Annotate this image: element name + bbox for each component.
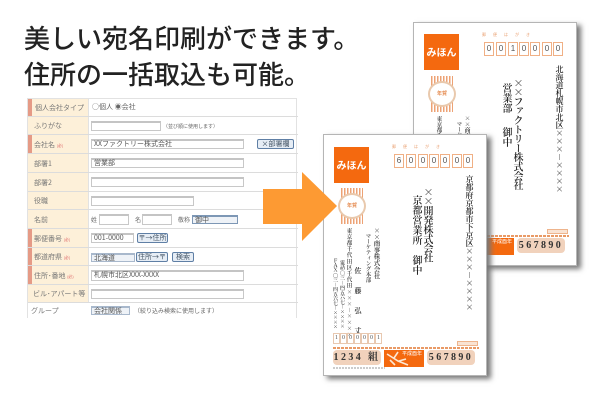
postcard: front (323, 134, 487, 376)
title line 2: 住所の一括取込も可能。 (24, 55, 310, 92)
panel: address entry form (27, 98, 297, 318)
postal code boxes: 1 (511, 44, 515, 53)
row: group: （絞り込み検索に使用します） (134, 306, 218, 315)
unstamped label (424, 34, 459, 70)
fine print (423, 235, 569, 237)
new year seal (341, 188, 363, 224)
row: prefecture: 北海道 (94, 253, 115, 263)
row: postal code: 〒→住所 (138, 233, 166, 243)
postal code boxes: 0 (421, 156, 425, 165)
new year seal: 年賀 (347, 202, 357, 209)
lottery number: 567890 (519, 240, 563, 251)
row: furigana: （並び順に使用します） (163, 123, 218, 130)
row: name: 御中 (195, 215, 209, 225)
postal code boxes (394, 154, 473, 168)
row: name (28, 210, 298, 229)
row: furigana: ふりがな (34, 121, 62, 131)
postcard: back (413, 22, 577, 266)
row: job title (28, 192, 298, 210)
row: department 2: 部署2 (34, 178, 52, 188)
row: company type: ○個人 ◉会社 (92, 102, 136, 112)
postal code boxes: 0 (556, 44, 560, 53)
row: name: 敬称 (178, 215, 190, 224)
row: department 1 (28, 154, 298, 173)
unstamped label (334, 147, 369, 183)
row: company type: 個人会社タイプ (35, 103, 84, 113)
unstamped label: みほん (336, 157, 366, 172)
sender postal boxes: 0 (370, 335, 373, 341)
row: postal code: 001-0000 (94, 233, 124, 243)
row: company name: XXファクトリー株式会社 (94, 139, 172, 149)
row: company name (28, 135, 298, 154)
sender phone: 電話 〇三－四五六七－×××× (339, 260, 346, 328)
postal code boxes: 6 (397, 156, 401, 165)
sender postal boxes: 0 (342, 335, 345, 341)
row: address: 札幌市北区XXX-XXXX (94, 270, 159, 280)
row: prefecture: 検索 (176, 252, 190, 262)
recipient address: 京都府京都市下京区×××－×××× (464, 175, 475, 311)
new year banner: 平成酉年 (492, 238, 512, 245)
honorific: 御中 (410, 255, 425, 275)
sender address: 東京都千代田区千代田×××－×××× (346, 228, 354, 338)
row: prefecture (28, 248, 298, 266)
row: company name: 会社名 (必) (34, 140, 63, 150)
lottery number (427, 350, 475, 365)
sender division: マーケ (456, 121, 464, 138)
sender postal boxes: 1 (377, 335, 380, 341)
postal code boxes: 0 (522, 44, 526, 53)
row: postal code (28, 229, 298, 248)
lottery mark (547, 229, 568, 234)
grey fine print (333, 367, 385, 369)
recipient department: 営業部 (500, 83, 515, 113)
new year seal (431, 76, 453, 112)
postcard heading: 郵便はがき (392, 144, 447, 150)
recipient company: ××ファクトリー株式会社 (511, 78, 526, 190)
row: building: ビル･アパート等 (33, 289, 85, 299)
sender division: マーケティング本部 (364, 233, 372, 282)
recipient office: 京都営業所 (410, 195, 425, 245)
sender company: ××商事 (463, 115, 472, 139)
sender postal boxes: 0 (363, 335, 366, 341)
sender postal boxes (333, 333, 382, 344)
honorific: 御中 (500, 127, 515, 147)
row: prefecture: 都道府県 (必) (34, 252, 70, 262)
row: building (28, 285, 298, 303)
postal code boxes: 0 (409, 156, 413, 165)
sender fax: ＦＡＸ 〇三－四五六七－×××× (332, 258, 339, 329)
postal code boxes: 0 (533, 44, 537, 53)
row: postal code: 郵便番号 (必) (34, 234, 70, 244)
postal code boxes: 0 (545, 44, 549, 53)
postal code boxes: 0 (487, 44, 491, 53)
unstamped label: みほん (426, 44, 456, 59)
postal code boxes: 0 (432, 156, 436, 165)
class pill: 1234 組 (334, 352, 380, 363)
row: company type (28, 99, 298, 117)
new year banner (474, 238, 514, 255)
recipient address: 北海道札幌市北区×××－×××× (554, 65, 565, 193)
row: furigana (28, 117, 298, 135)
new year seal: 年賀 (437, 90, 447, 97)
row: name: 姓 (91, 215, 97, 224)
row: address: 住所･番地 (必) (34, 271, 74, 281)
row: department 2 (28, 173, 298, 192)
row: group: 会社関係 (94, 306, 122, 316)
sender postal boxes: 1 (335, 335, 338, 341)
postal code boxes: 0 (499, 44, 503, 53)
new year banner (384, 350, 424, 367)
sender postal boxes: 0 (349, 335, 352, 341)
lottery number (517, 238, 565, 253)
recipient company: ××開発株式会社 (421, 187, 436, 262)
postal code boxes: 0 (443, 156, 447, 165)
arrow (263, 172, 337, 241)
sender company: ××商事株式会社 (372, 227, 382, 279)
row: company name: ×部署欄 (262, 139, 290, 149)
lottery number: 567890 (429, 352, 473, 363)
row: group (31, 306, 218, 316)
postal code boxes: 0 (455, 156, 459, 165)
row: name: 名 (135, 215, 141, 224)
row: address (28, 266, 298, 285)
postal code boxes: 0 (466, 156, 470, 165)
fine print (333, 347, 479, 349)
title line 1: 美しい宛名印刷ができます。 (24, 19, 359, 56)
row: department 1: 部署1 (34, 159, 52, 169)
sender postal boxes: 0 (356, 335, 359, 341)
row: department 1: 営業部 (94, 158, 115, 168)
lottery mark (457, 341, 478, 346)
postcard heading: 郵便はがき (482, 32, 537, 38)
row: group: グループ (31, 306, 59, 316)
row: name: 名前 (34, 215, 48, 225)
sender address: 東京都千代田区 (436, 116, 444, 154)
row: job title: 役職 (34, 196, 48, 206)
new year banner: 平成酉年 (402, 350, 422, 357)
row: prefecture: 住所→〒 (138, 252, 166, 262)
sender name: 佐藤弘丈 (353, 267, 363, 347)
postal code boxes (484, 42, 563, 56)
